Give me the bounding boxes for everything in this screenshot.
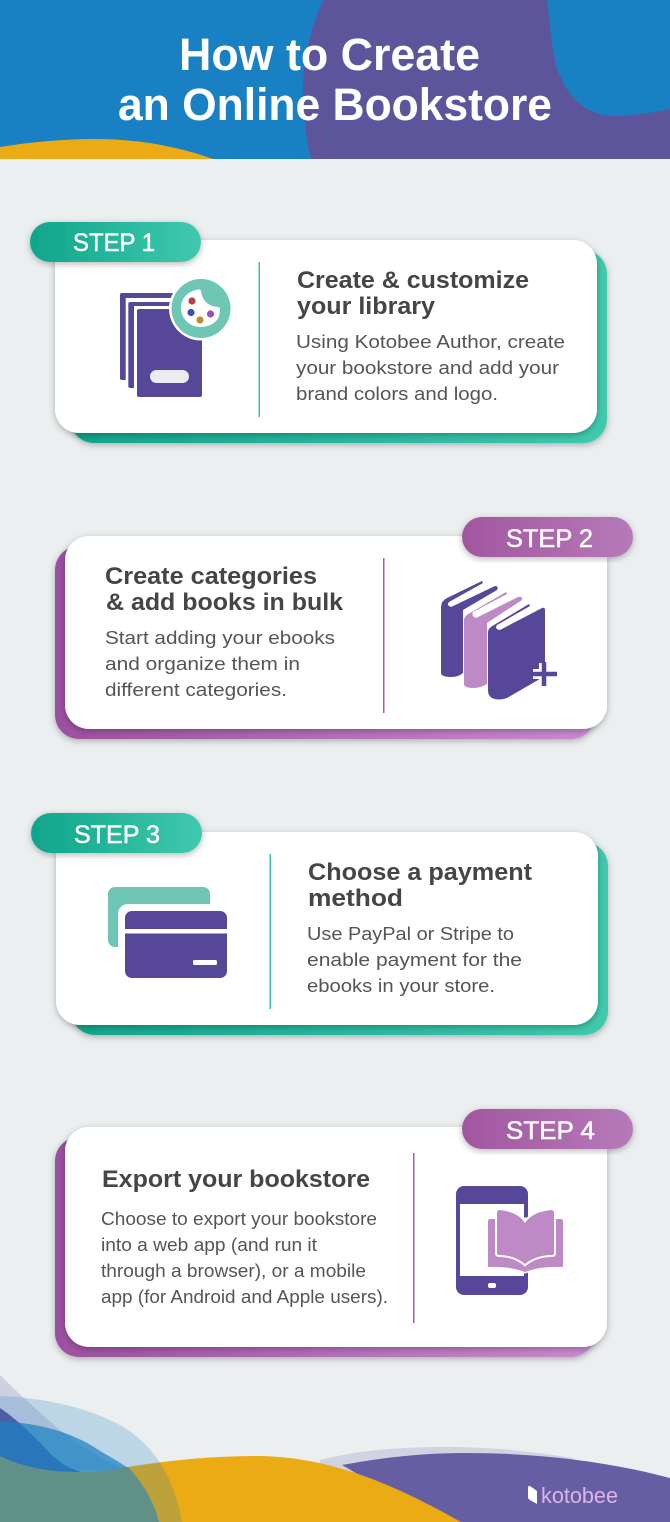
step 4 text: Choose to export your bookstore (101, 1208, 377, 1229)
title (118, 29, 552, 130)
step 4 text (101, 1208, 388, 1307)
step 3 text: Use PayPal or Stripe to (307, 923, 514, 944)
icon: books with plus (441, 581, 557, 700)
step 3 text (307, 923, 522, 996)
step 3 text: ebooks in your store. (307, 975, 495, 996)
step 4 badge: STEP 4 (506, 1117, 595, 1145)
panel: step 4 (55, 1109, 633, 1357)
panel: step 2 (55, 517, 633, 739)
step 2 badge: STEP 2 (506, 525, 593, 553)
step 1 text: Using Kotobee Author, create (296, 331, 565, 352)
kotobee logo: kotobee (541, 1483, 618, 1508)
step 1 heading (297, 267, 529, 320)
step 4 text: into a web app (and run it (101, 1234, 317, 1255)
panel: step 1 (30, 222, 607, 443)
step 4 text: app (for Android and Apple users). (101, 1286, 388, 1307)
step 1 badge (30, 222, 201, 262)
step 4 badge (462, 1109, 633, 1149)
step 1 heading: Create & customize (297, 267, 529, 294)
step 2 heading: & add books in bulk (106, 589, 344, 616)
step 3 badge (31, 813, 202, 853)
title: an Online Bookstore (118, 79, 552, 130)
step 2 text: and organize them in (105, 653, 300, 674)
icon: credit cards (108, 887, 234, 985)
header banner (0, 0, 670, 159)
step 3 heading: Choose a payment (308, 859, 532, 886)
step 1 text: your bookstore and add your (296, 357, 559, 378)
icon: tablet with open book (456, 1186, 563, 1295)
step 1 heading: your library (297, 293, 436, 320)
step 1 text: brand colors and logo. (296, 383, 498, 404)
panel: step 3 (31, 813, 608, 1035)
step 3 heading: method (308, 885, 403, 912)
step 4 heading: Export your bookstore (102, 1166, 370, 1193)
step 3 text: enable payment for the (307, 949, 522, 970)
step 3 heading (308, 859, 532, 912)
title: How to Create (179, 29, 480, 80)
step 2 badge (462, 517, 633, 557)
step 2 text (105, 627, 335, 700)
icon: books with palette (120, 276, 233, 397)
step 2 heading: Create categories (105, 563, 317, 590)
step 1 text (296, 331, 565, 404)
step 2 text: Start adding your ebooks (105, 627, 335, 648)
step 3 badge: STEP 3 (74, 821, 160, 849)
step 4 text: through a browser), or a mobile (101, 1260, 366, 1281)
step 2 heading (105, 563, 344, 616)
step 2 text: different categories. (105, 679, 287, 700)
footer waves (0, 1375, 670, 1522)
step 1 badge: STEP 1 (73, 229, 155, 257)
